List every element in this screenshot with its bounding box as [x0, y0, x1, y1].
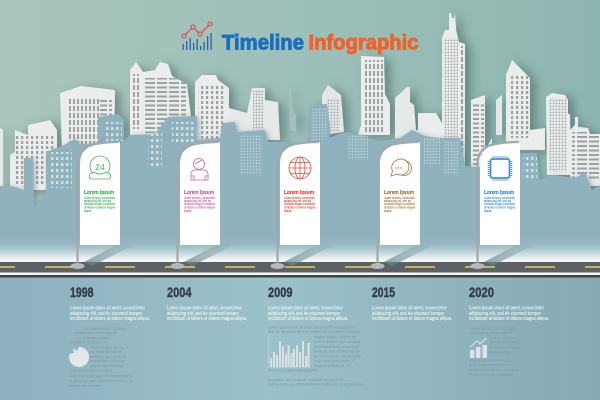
faint paragraph: sunt in culpa qui officia deserunt mollit anim id est laborum.: [268, 382, 364, 386]
flag text: adipiscing elit, sed do: [484, 199, 511, 203]
icon: microchip: [488, 157, 512, 180]
title icon: chart: [182, 22, 212, 50]
description: [167, 306, 247, 322]
faint paragraph: Duis aute irure dolor in: [314, 359, 354, 363]
faint paragraph: Excepteur sint occaecat cupidatat non proident,: [268, 378, 344, 382]
building 5: [229, 88, 280, 140]
description: incididunt ut labore et dolore magna aliqua.: [167, 316, 247, 322]
faint paragraph: sed do eiusmod: [490, 336, 517, 340]
faint paragraph: quis nostrud exercitation: [469, 363, 513, 367]
faint paragraph: Lorem ipsum dolor sit amet, consectetur adipiscing elit,: [268, 326, 356, 330]
faint paragraph: exercitation ullamco: [314, 345, 358, 349]
building left edge: [0, 128, 3, 190]
background sky: [0, 0, 600, 262]
road: [0, 260, 600, 278]
description: adipiscing elit, sed do eiusmod tempor: [167, 311, 239, 317]
building 9: [418, 113, 443, 150]
flag text: adipiscing elit, sed do: [184, 199, 211, 203]
icon: support agent: [191, 158, 208, 180]
flag text: Lorem sit amet, consectetur: [84, 196, 115, 200]
flag text: Lorem sit amet, consectetur: [184, 196, 215, 200]
description: Lorem ipsum dolor sit amet, consectetur: [70, 306, 145, 312]
faint paragraph: in voluptate velit esse cillum dolore eu: [69, 379, 133, 383]
flag text: Lorem sit amet, consectetur: [284, 196, 315, 200]
front skyline: blue city silhouette: [0, 116, 600, 262]
flag text: ut labore et dolore magna: [184, 206, 215, 210]
description: incididunt ut labore et dolore magna aliqua.: [70, 316, 150, 322]
description: [268, 306, 348, 322]
building 4: [195, 75, 229, 140]
faint paragraph: laboris nisi ut aliquip: [90, 364, 123, 368]
faint paragraph: Ut enim ad minim: [90, 350, 122, 354]
building 3: [130, 62, 193, 135]
road dashes: [0, 266, 600, 268]
description: adipiscing elit, sed do eiusmod tempor: [268, 311, 340, 317]
flag 2020: [470, 142, 534, 269]
blue building windows: [50, 152, 72, 188]
faint paragraph: Lorem ipsum dolor sit amet,: [469, 326, 516, 330]
faint paragraph: ea commodo consequat.: [314, 354, 362, 358]
building 6: [322, 85, 344, 135]
flag text: [184, 196, 216, 213]
faint paragraph: Duis aute irure dolor in reprehenderit: [69, 374, 132, 378]
description: [469, 306, 549, 322]
building 12: [506, 60, 545, 150]
flag text: aliqua.: [284, 209, 292, 213]
faint paragraph: [268, 326, 364, 386]
flag heading: Lorem Ipsum: [184, 190, 214, 196]
back skyline: white paper buildings: [0, 13, 600, 190]
title: Timeline: [222, 32, 304, 54]
flag text: ut labore et dolore magna: [384, 206, 415, 210]
flag heading: Lorem Ipsum: [284, 190, 314, 196]
pole base: [170, 263, 184, 269]
faint paragraph: incididunt ut labore et: [69, 340, 106, 344]
faint paragraph: magna aliqua. Ut enim ad: [314, 335, 356, 339]
flag text: [84, 196, 116, 213]
flag text: adipiscing elit, sed do: [284, 199, 311, 203]
faint paragraph: dolore eu fugiat nulla pariatur.: [268, 368, 318, 372]
pole base: [470, 263, 484, 269]
pie chart: [69, 347, 89, 367]
faint paragraph: tempor incididunt: [490, 340, 520, 344]
icon: speech bubbles: [391, 159, 412, 176]
description: incididunt ut labore et dolore magna aliqua.: [372, 316, 452, 322]
faint paragraph: ex ea commodo consequat.: [469, 373, 514, 377]
faint paragraph: reprehenderit in: [314, 364, 350, 368]
ground fade: [0, 236, 600, 260]
flag text: aliqua.: [184, 209, 192, 213]
description: incididunt ut labore et dolore magna aliqua.: [469, 316, 549, 322]
description: Lorem ipsum dolor sit amet, consectetur: [372, 306, 447, 312]
description: incididunt ut labore et dolore magna aliqua.: [268, 316, 348, 322]
flag heading: Lorem Ipsum: [84, 190, 114, 196]
title: [222, 32, 419, 54]
year column 1998: [69, 284, 150, 388]
flag text: eiusmod tempor incididunt: [84, 202, 116, 206]
faint paragraph: [469, 326, 520, 377]
building 11: [496, 95, 502, 135]
year label: 1998: [70, 284, 94, 300]
pole base: [370, 263, 384, 269]
flag text: adipiscing elit, sed do: [384, 199, 411, 203]
flag text: aliqua.: [84, 209, 92, 213]
flag text: eiusmod tempor incididunt: [284, 202, 316, 206]
faint paragraph: consectetur, adipiscing elit,: [75, 331, 118, 335]
faint paragraph: sed do eiusmod tempor: [76, 336, 111, 340]
year label: 2009: [268, 284, 293, 300]
icon: 24 hour phone: 24: [95, 162, 105, 172]
building 10: [471, 95, 492, 170]
description: [70, 306, 150, 322]
faint paragraph: consectetur adipiscing elit,: [469, 331, 513, 335]
flag text: aliqua.: [484, 209, 492, 213]
building 2: [60, 86, 115, 150]
faint paragraph: minim veniam, quis nostrud: [314, 340, 360, 344]
faint paragraph: ex ea commodo consequat.: [69, 368, 113, 372]
flag heading: Lorem Ipsum: [384, 190, 414, 196]
icon: growth bars: [470, 338, 487, 358]
building 1: [10, 120, 57, 190]
flag 2015: [370, 142, 434, 269]
flag heading: Lorem Ipsum: [484, 190, 514, 196]
lower panel background: [0, 276, 600, 400]
flag text: aliqua.: [384, 209, 392, 213]
faint paragraph: dolore magna aliqua.: [90, 346, 124, 350]
faint paragraph: magna aliqua.: [490, 350, 512, 354]
year column 2009: [268, 284, 364, 386]
flag text: eiusmod tempor incididunt: [484, 202, 516, 206]
pole base: [70, 263, 84, 269]
flag text: Lorem sit amet, consectetur: [484, 196, 515, 200]
building 13: [546, 93, 571, 175]
flag text: eiusmod tempor incididunt: [384, 202, 416, 206]
faint paragraph: exercitation ullamco: [90, 359, 124, 363]
faint paragraph: sed do eiusmod tempor incididunt ut labore et dolore: [268, 330, 360, 334]
flag text: [284, 196, 316, 213]
year column 2015: [372, 284, 452, 322]
flag text: ut labore et dolore magna: [484, 206, 515, 210]
faint paragraph: veniam, quis nostrud: [90, 355, 126, 359]
flag 1998: [70, 142, 134, 269]
building 14: [570, 117, 600, 186]
pole base: [270, 263, 284, 269]
description: Lorem ipsum dolor sit amet, consectetur: [268, 306, 343, 312]
year column 2020: [469, 284, 549, 377]
year label: 2004: [167, 284, 192, 300]
description: adipiscing elit, sed do eiusmod tempor: [469, 311, 541, 317]
flag 2004: [170, 142, 234, 269]
faint paragraph: Lorem ipsum dolor sit amet,: [82, 326, 126, 330]
description: [372, 306, 452, 322]
description: Lorem ipsum dolor sit amet, consectetur: [469, 306, 544, 312]
building 7: [358, 56, 390, 135]
year label: 2015: [372, 284, 395, 300]
faint paragraph: [69, 326, 133, 388]
description: adipiscing elit, sed do eiusmod tempor: [70, 311, 142, 317]
bar chart: [268, 335, 310, 367]
faint paragraph: ut labore et dolore: [490, 346, 520, 350]
faint paragraph: fugiat nulla pariatur.: [69, 384, 101, 388]
building 8: [395, 87, 440, 150]
description: adipiscing elit, sed do eiusmod tempor: [372, 311, 444, 317]
flag text: adipiscing elit, sed do: [84, 199, 111, 203]
flag 2009: [270, 142, 334, 269]
flag text: ut labore et dolore magna: [84, 206, 115, 210]
tall tower: [442, 13, 465, 165]
flag text: eiusmod tempor incididunt: [184, 202, 216, 206]
faint paragraph: Ut enim ad minim veniam,: [469, 358, 511, 362]
flag text: [384, 196, 416, 213]
faint paragraph: laboris nisi ut aliquip ex: [314, 350, 360, 354]
flag text: Lorem sit amet, consectetur: [384, 196, 415, 200]
blue mid towers: [289, 88, 296, 132]
year column 2004: [167, 284, 247, 322]
faint paragraph: ullamco laboris nisi ut aliquip: [469, 368, 518, 372]
description: Lorem ipsum dolor sit amet, consectetur: [167, 306, 242, 312]
flag text: [484, 196, 516, 213]
flag text: ut labore et dolore magna: [284, 206, 315, 210]
year label: 2020: [469, 284, 494, 300]
title: Infographic: [308, 32, 419, 54]
icon: globe: [289, 157, 311, 179]
